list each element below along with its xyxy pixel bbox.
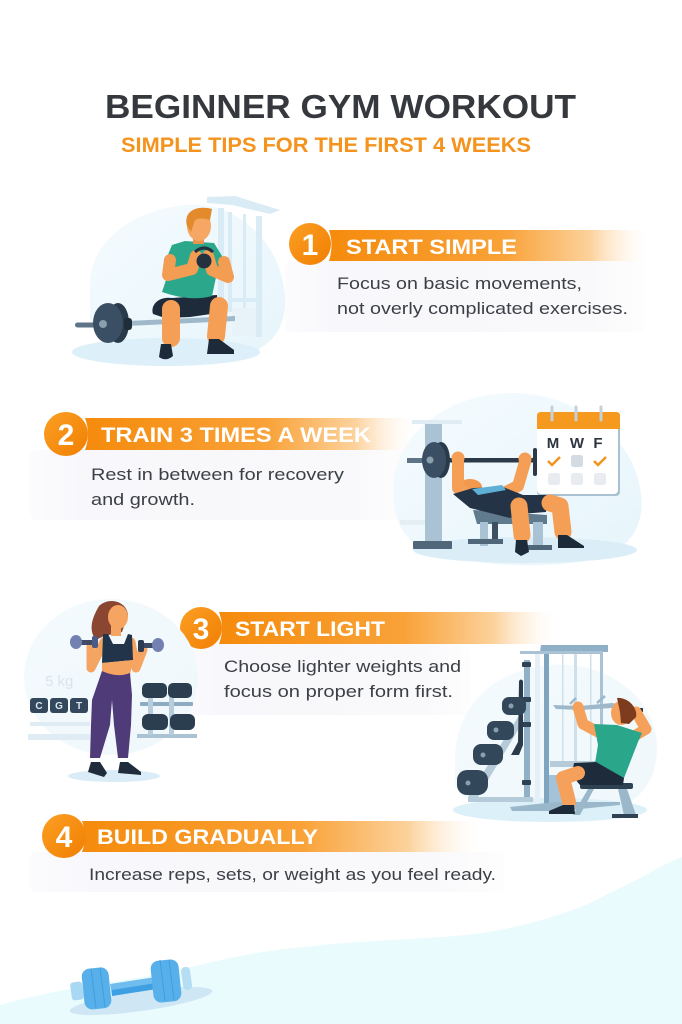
man arms	[458, 460, 525, 496]
step 1 body: Focus on basic movements,	[337, 274, 582, 293]
left column and plate rack	[468, 660, 533, 802]
calendar rings	[552, 407, 601, 420]
man leg	[563, 773, 578, 802]
floor shadow	[413, 537, 637, 563]
step 4 number badge: 4	[56, 821, 73, 854]
weight blocks C G T: C	[35, 701, 43, 712]
step 3 body: Choose lighter weights and	[224, 657, 461, 676]
illustration: bench press with calendar	[393, 393, 642, 565]
shoes	[515, 535, 584, 556]
calendar day letters	[547, 435, 603, 452]
pulldown bar	[553, 696, 643, 712]
weight blocks C G T: G	[55, 701, 63, 712]
dumbbell rack	[137, 683, 197, 738]
panel: step 2 train 3 times a week	[30, 412, 415, 520]
illustration: woman with dumbbells	[24, 599, 198, 782]
man head	[186, 208, 212, 244]
calendar day letters: W	[570, 435, 585, 452]
step 2 number badge	[44, 412, 88, 456]
man legs	[519, 503, 563, 535]
floor shadow	[453, 798, 647, 822]
man torso	[453, 487, 549, 518]
hands	[452, 452, 532, 466]
panel: step 1 start simple	[285, 223, 648, 332]
faded weight label: 5 kg	[45, 673, 73, 690]
weight blocks C G T	[28, 698, 90, 740]
kettlebell	[195, 248, 213, 268]
step 2 text card	[30, 450, 415, 520]
illustration: lat pulldown machine	[453, 645, 657, 822]
step 2 number badge: 2	[58, 419, 74, 452]
weight plates	[457, 697, 526, 795]
step 2 heading: TRAIN 3 TIMES A WEEK	[101, 424, 371, 447]
man shoe	[549, 805, 575, 814]
woman leggings	[90, 671, 132, 758]
shoes	[159, 339, 234, 359]
step 2 body: and growth.	[91, 490, 195, 509]
calendar day letters: F	[593, 435, 603, 452]
rack	[400, 420, 462, 549]
bottom wave background	[0, 857, 682, 1024]
step 1 text card	[285, 261, 645, 332]
step 3 number badge	[180, 607, 222, 649]
man head	[611, 698, 636, 725]
weight plate centres	[466, 704, 514, 786]
step 4 text card	[30, 852, 505, 892]
barbell	[407, 442, 537, 478]
woman top	[102, 634, 133, 663]
calendar	[537, 407, 620, 496]
step 3 header bar	[219, 612, 555, 644]
man torso	[594, 724, 642, 778]
panel: step 3 start light	[175, 607, 555, 715]
man legs and shorts	[152, 295, 218, 318]
floor shadow	[72, 338, 260, 366]
step 2 body	[91, 465, 345, 509]
step 2 header bar	[85, 418, 415, 450]
man seat	[573, 783, 638, 818]
step 1 header bar	[329, 230, 648, 261]
step 4 number badge	[42, 814, 86, 858]
step 1 body	[337, 274, 628, 318]
bench	[468, 510, 552, 550]
floor shadow	[68, 770, 160, 782]
step 4 heading: BUILD GRADUALLY	[97, 826, 318, 849]
barbell	[75, 303, 235, 343]
step 3 body	[224, 657, 461, 701]
step 3 number badge: 3	[193, 613, 209, 646]
subtitle: SIMPLE TIPS FOR THE FIRST 4 WEEKS	[121, 134, 531, 157]
step 3 text card	[175, 644, 470, 715]
man torso	[162, 241, 227, 298]
woman arms	[91, 642, 143, 668]
step 4 header bar	[82, 821, 480, 852]
dumbbells	[70, 635, 164, 652]
step 1 number badge: 1	[302, 229, 318, 262]
calendar checks and squares	[548, 455, 606, 485]
step 1 heading: START SIMPLE	[346, 236, 517, 259]
step 1 body: not overly complicated exercises.	[337, 299, 628, 318]
woman shoes	[88, 762, 141, 777]
man shorts	[573, 762, 624, 785]
machine frame	[510, 645, 620, 811]
icon: blue dumbbell	[68, 959, 214, 1021]
step 4 body: Increase reps, sets, or weight as you feel ready.	[89, 865, 496, 884]
calendar day letters: M	[547, 435, 559, 452]
man arms	[578, 707, 646, 735]
gym machine backdrop	[207, 196, 280, 338]
man arms	[168, 256, 228, 277]
panel: step 4 build gradually	[30, 814, 505, 892]
step 3 heading: START LIGHT	[235, 618, 385, 641]
step 3 body: focus on proper form first.	[224, 682, 453, 701]
woman midriff	[102, 660, 133, 675]
man head	[458, 479, 482, 495]
title: BEGINNER GYM WORKOUT	[105, 88, 576, 125]
woman neck and head	[108, 605, 128, 636]
step 1 number badge	[289, 223, 331, 265]
weight blocks C G T: T	[76, 701, 82, 712]
illustration: man squatting with kettlebell	[72, 196, 285, 366]
step 2 body: Rest in between for recovery	[91, 465, 345, 484]
woman hair	[92, 601, 128, 640]
